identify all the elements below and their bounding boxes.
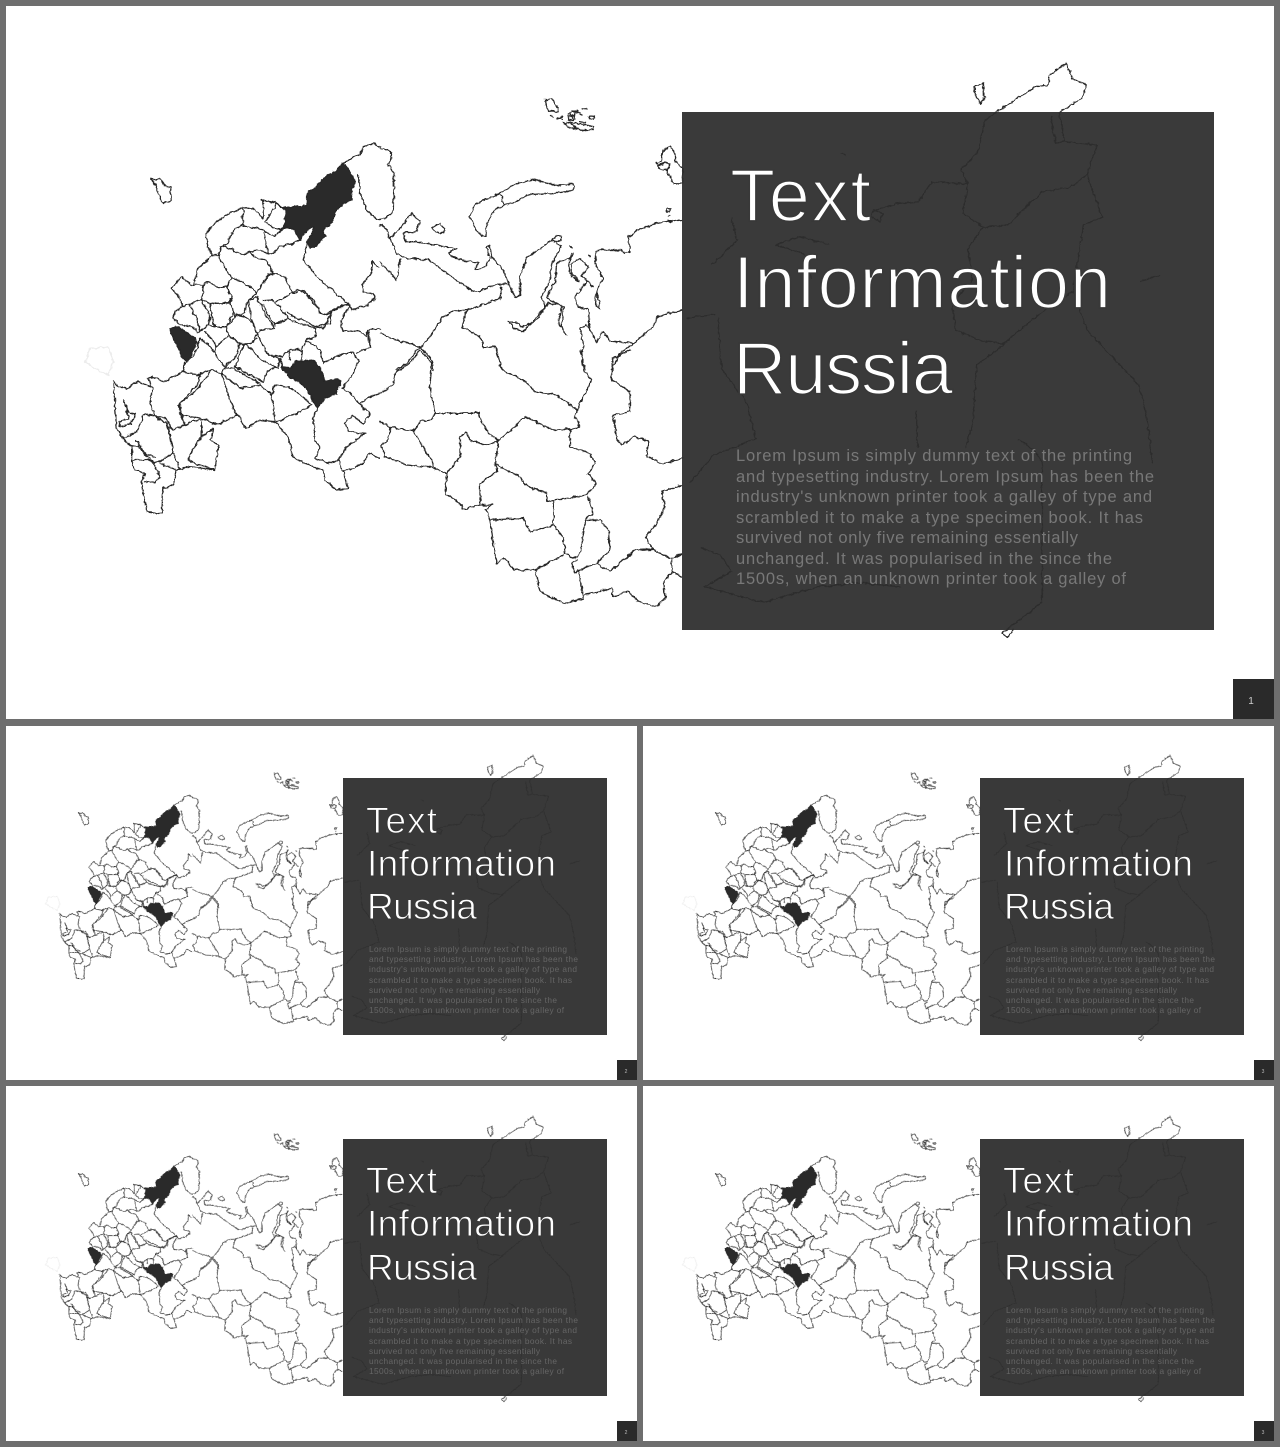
body text: Lorem Ipsum is simply dummy text of the printing — [1006, 944, 1204, 954]
panel: large slide 1 — [6, 6, 1274, 719]
panel: small slide 5 — [643, 1086, 1274, 1441]
title: Russia — [1004, 1247, 1114, 1288]
body text: industry's unknown printer took a galley of type and — [1006, 964, 1214, 974]
body text: 1500s, when an unknown printer took a galley of — [1006, 1366, 1202, 1376]
title: Information — [1004, 1203, 1193, 1244]
body text: and typesetting industry. Lorem Ipsum has been the — [1006, 954, 1215, 964]
panel: dark text box — [682, 112, 1214, 630]
map: Russia regions — [683, 1117, 1216, 1402]
title: Russia — [367, 886, 477, 927]
title — [366, 800, 556, 927]
map: Russia regions — [46, 756, 579, 1041]
page number badge — [1254, 1421, 1274, 1441]
title — [366, 1160, 556, 1288]
title: Text — [366, 800, 438, 841]
title: Russia — [733, 327, 954, 410]
title: Russia — [367, 1247, 477, 1288]
body text: scrambled it to make a type specimen book. It has — [369, 1336, 572, 1346]
title: Information — [1004, 843, 1193, 884]
body text: industry's unknown printer took a galley of type and — [736, 488, 1152, 506]
panel: dark text box — [980, 778, 1244, 1035]
body text: and typesetting industry. Lorem Ipsum has been the — [1006, 1315, 1215, 1325]
panel: dark text box — [343, 778, 607, 1035]
body text: and typesetting industry. Lorem Ipsum has been the — [369, 1315, 578, 1325]
body text: and typesetting industry. Lorem Ipsum has been the — [736, 468, 1154, 486]
body text: Lorem Ipsum is simply dummy text of the printing — [369, 1305, 567, 1315]
title: Information — [367, 1203, 556, 1244]
body text — [1006, 1305, 1215, 1376]
panel: small slide 4 — [6, 1086, 637, 1441]
map: Russia regions with three highlighted — [85, 64, 1159, 637]
title — [1003, 1160, 1193, 1288]
body text: 1500s, when an unknown printer took a galley of — [369, 1366, 565, 1376]
body text: 1500s, when an unknown printer took a galley of — [1006, 1005, 1202, 1015]
title: Text — [366, 1160, 438, 1201]
title: Information — [367, 843, 556, 884]
body text: industry's unknown printer took a galley of type and — [1006, 1325, 1214, 1335]
page number badge: 3 — [1262, 1069, 1265, 1075]
page number badge: 3 — [1262, 1430, 1265, 1436]
body text — [369, 944, 578, 1015]
body text: Lorem Ipsum is simply dummy text of the printing — [1006, 1305, 1204, 1315]
panel: dark text box — [980, 1139, 1244, 1396]
title: Text — [1003, 1160, 1075, 1201]
page number badge — [1233, 679, 1274, 719]
map: Russia regions — [683, 756, 1216, 1041]
body text — [736, 447, 1154, 588]
body text: scrambled it to make a type specimen book. It has — [736, 509, 1143, 527]
body text: survived not only five remaining essentially — [1006, 1346, 1178, 1356]
page number badge — [617, 1060, 637, 1080]
body text: industry's unknown printer took a galley of type and — [369, 1325, 577, 1335]
body text: unchanged. It was popularised in the since the — [369, 1356, 557, 1366]
body text: unchanged. It was popularised in the since the — [736, 550, 1112, 568]
title: Russia — [1004, 886, 1114, 927]
page number badge — [617, 1421, 637, 1441]
body text: unchanged. It was popularised in the since the — [1006, 1356, 1194, 1366]
body text — [1006, 944, 1215, 1015]
page number badge: 1 — [1248, 696, 1254, 707]
title: Text — [1003, 800, 1075, 841]
panel: small slide 3 — [643, 726, 1274, 1080]
body text: industry's unknown printer took a galley of type and — [369, 964, 577, 974]
body text — [369, 1305, 578, 1376]
title: Text — [730, 154, 871, 237]
panel: dark text box — [343, 1139, 607, 1396]
body text: unchanged. It was popularised in the since the — [1006, 995, 1194, 1005]
body text: survived not only five remaining essentially — [369, 985, 541, 995]
page number badge: 2 — [625, 1069, 628, 1075]
body text: unchanged. It was popularised in the since the — [369, 995, 557, 1005]
body text: survived not only five remaining essentially — [369, 1346, 541, 1356]
title — [730, 154, 1111, 410]
body text: survived not only five remaining essentially — [736, 529, 1079, 547]
body text: 1500s, when an unknown printer took a galley of — [369, 1005, 565, 1015]
page number badge: 2 — [625, 1430, 628, 1436]
body text: 1500s, when an unknown printer took a galley of — [736, 570, 1126, 588]
body text: scrambled it to make a type specimen book. It has — [1006, 975, 1209, 985]
body text: scrambled it to make a type specimen book. It has — [369, 975, 572, 985]
title: Information — [733, 241, 1111, 324]
body text: Lorem Ipsum is simply dummy text of the printing — [736, 447, 1132, 465]
map: Russia regions — [46, 1117, 579, 1402]
page number badge — [1254, 1060, 1274, 1080]
body text: survived not only five remaining essentially — [1006, 985, 1178, 995]
body text: scrambled it to make a type specimen book. It has — [1006, 1336, 1209, 1346]
body text: and typesetting industry. Lorem Ipsum has been the — [369, 954, 578, 964]
panel: small slide 2 — [6, 726, 637, 1080]
title — [1003, 800, 1193, 927]
body text: Lorem Ipsum is simply dummy text of the printing — [369, 944, 567, 954]
